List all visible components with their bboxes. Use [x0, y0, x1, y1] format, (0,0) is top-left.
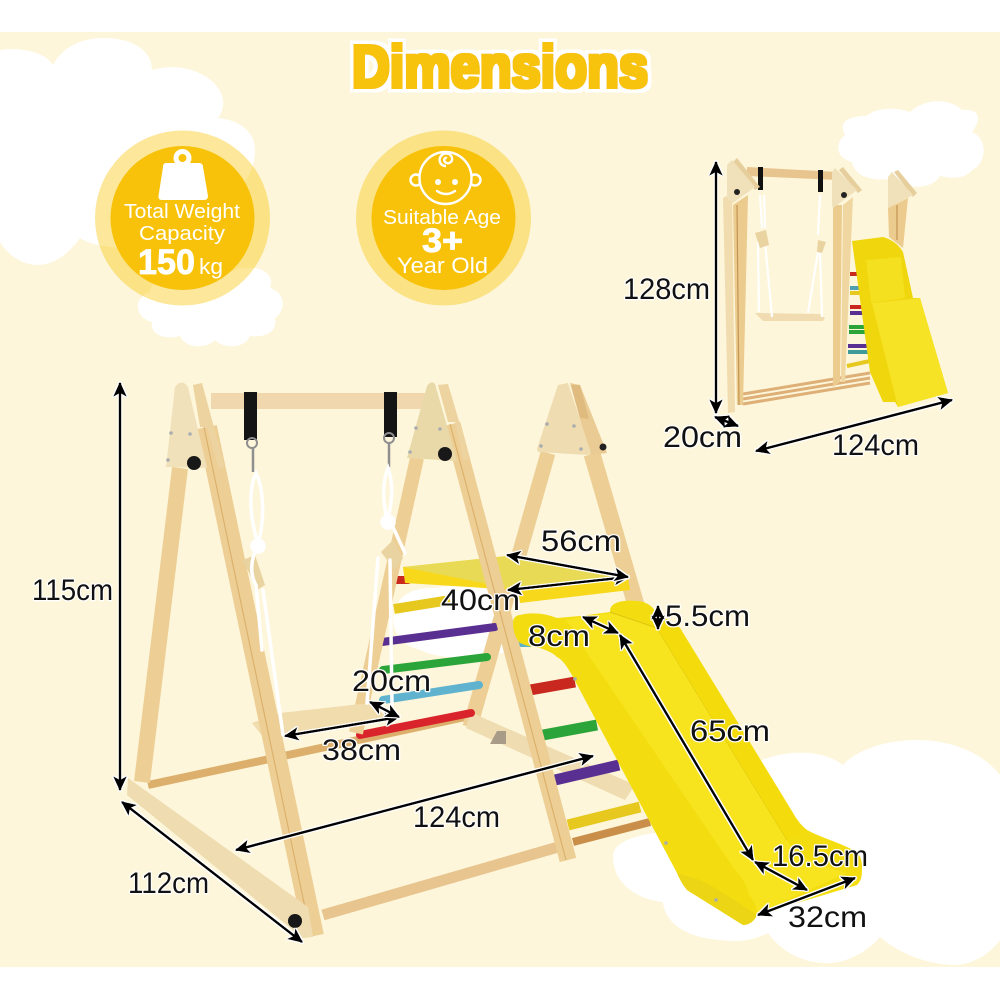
main playset	[127, 382, 862, 938]
middle plates	[438, 384, 470, 460]
middle post	[833, 205, 842, 387]
badge: suitable age: 3+	[422, 222, 463, 260]
badge: suitable age	[356, 130, 531, 306]
cloud: below weight badge	[138, 267, 283, 346]
label: 124cm: 124cm	[413, 801, 500, 834]
slide	[513, 601, 862, 925]
label: 65cm: 65cm	[690, 715, 770, 748]
label: 20cm: 20cm	[352, 665, 431, 698]
base cross board	[466, 712, 635, 800]
third frame plates	[537, 383, 607, 455]
icon: weight	[158, 152, 208, 200]
ladder rungs	[360, 580, 650, 842]
right plate	[894, 170, 917, 197]
title: Dimensions	[352, 34, 648, 100]
rope adjusters	[243, 540, 403, 590]
arrow: slide 32cm	[758, 878, 855, 915]
small folded playset	[723, 158, 948, 413]
cloud: behind ladder	[393, 586, 510, 658]
badge: total weight capacity: Total Weight	[124, 201, 240, 223]
label: 112cm: 112cm	[128, 867, 209, 900]
badge: total weight capacity	[95, 130, 270, 306]
bracket	[490, 731, 506, 744]
label: 5.5cm: 5.5cm	[665, 600, 750, 633]
knob: left	[187, 456, 201, 470]
swing ropes	[758, 195, 822, 317]
cloud: bottom right	[613, 740, 1000, 965]
left plate	[733, 158, 760, 190]
straps	[758, 167, 823, 192]
label: 40cm: 40cm	[441, 584, 520, 617]
arrow: slide 16.5cm	[755, 862, 807, 890]
third frame right leg	[592, 454, 638, 612]
arrow: folded 20cm	[715, 417, 738, 426]
arrow: seat 38cm	[285, 717, 399, 736]
icon: baby face	[410, 152, 480, 204]
arrow: slide 65cm	[620, 635, 753, 860]
swing seat	[755, 313, 825, 321]
badge: total weight capacity: kg	[199, 254, 223, 279]
badge: total weight capacity: 150	[138, 243, 195, 282]
knob: base	[288, 914, 302, 928]
arrow: platform 40cm	[508, 577, 628, 590]
right post	[888, 198, 908, 248]
left frame back leg	[142, 468, 180, 782]
top bar	[211, 393, 432, 409]
straps	[244, 392, 397, 440]
ropes	[251, 468, 405, 735]
label: 56cm: 56cm	[541, 525, 621, 558]
arrow: seat 20cm	[370, 702, 399, 717]
label: 16.5cm: 16.5cm	[772, 840, 868, 873]
front rail	[323, 845, 565, 915]
label: 38cm: 38cm	[322, 734, 401, 767]
base board	[127, 778, 313, 938]
label: 128cm: 128cm	[623, 273, 710, 306]
badge: suitable age: Suitable Age	[383, 207, 501, 229]
middle frame back leg	[356, 458, 417, 733]
left folded post	[723, 193, 735, 413]
arrow: height 115cm	[119, 383, 121, 790]
folded slide	[852, 237, 948, 407]
knob: middle	[438, 447, 452, 461]
badge: suitable age: Year Old	[397, 253, 488, 278]
third frame left leg	[470, 453, 548, 727]
ladder rungs	[850, 272, 859, 276]
left frame front leg	[207, 427, 314, 936]
cloud: top right	[838, 101, 984, 187]
bottom rails	[743, 373, 870, 404]
back rail	[148, 716, 470, 785]
badge: total weight capacity: Capacity	[139, 223, 225, 245]
rope adjusters	[755, 230, 826, 253]
arrow: folded 128cm	[715, 162, 717, 413]
middle frame front leg	[452, 424, 568, 860]
middle plate	[839, 167, 862, 193]
hanging bar	[747, 167, 838, 180]
label: 32cm: 32cm	[788, 901, 867, 934]
hooks	[247, 433, 394, 472]
cloud: top left	[0, 38, 255, 265]
arrow: folded 124cm	[756, 400, 952, 451]
arrow: platform 56cm	[507, 555, 628, 577]
label: 115cm: 115cm	[32, 574, 113, 607]
yellow platform	[403, 556, 630, 603]
label: 8cm: 8cm	[528, 620, 590, 653]
swing seat	[252, 703, 387, 738]
arrow: slide 5.5cm	[657, 606, 659, 629]
label: folded 20cm: 20cm	[663, 421, 742, 454]
arrow: slide 8cm	[583, 617, 618, 633]
left plates	[193, 383, 225, 469]
label: folded 124cm: 124cm	[832, 429, 919, 462]
arrow: depth 112cm	[122, 802, 302, 942]
arrow: width 124cm	[236, 756, 593, 850]
